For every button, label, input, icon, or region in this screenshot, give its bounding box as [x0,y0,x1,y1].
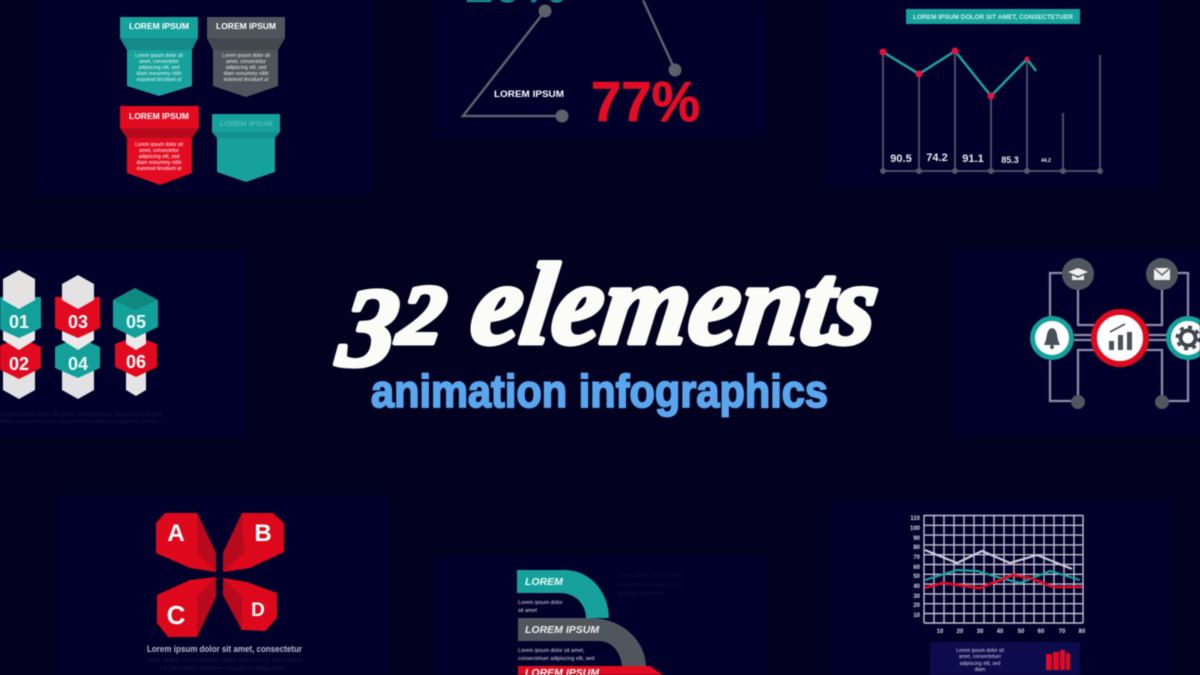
value labels: 44.2 [1041,158,1051,164]
y axis labels: 80 [913,545,921,551]
column 05 06: 05 [126,312,146,332]
legend box: diam [975,667,985,673]
shield: red: diam nonummy nibh [136,160,182,166]
y axis labels: 20 [913,603,921,609]
faint caption: Lorem ipsum dolor sit amet, consectetuer adipiscing elit sed [0,412,162,418]
text block: Lorem ipsum dolor [518,600,563,606]
title: 3 [332,266,406,390]
ribbon: gray [518,618,646,666]
shield: gray: LOREM IPSUM [216,21,276,31]
node dots [1071,395,1169,409]
connector dots [538,4,682,122]
faint text block: consectetuer adipiscing elit [617,582,682,588]
icon: gear [1168,318,1200,358]
text block: Lorem ipsum dolor sit amet, [518,648,585,654]
y axis labels: 70 [913,555,921,561]
panel: curved ribbons [432,555,768,675]
caption: Lorem ipsum dolor sit amet, consectetur [147,644,302,654]
y axis labels: 10 [913,613,921,619]
shield: red [120,106,199,185]
shield: gray: diam nonummy nibh [223,71,269,77]
title: 2 [391,269,451,362]
data line [883,51,1036,96]
petal B: B [254,520,272,547]
panel: line chart [826,0,1160,187]
faint caption [0,412,162,425]
title: elements [464,241,886,369]
series: red [925,575,1082,588]
axis dots [880,168,1103,174]
value labels [890,152,1051,165]
column 01 02 [0,270,41,399]
text block [518,648,594,662]
chart title bar [906,9,1080,24]
y axis labels: 110 [910,516,921,522]
connector lines [1050,273,1188,401]
shield: red: euismod tincidunt ut [137,166,182,172]
legend box: amet, consectetuer [959,654,1002,660]
faint caption: diam nonummy nibh euismod tincidunt ut laoreet dolore [0,419,158,425]
shield: teal: Lorem ipsum dolor sit [135,53,184,59]
panel: ABCD petals [55,495,390,675]
shield: teal: amet, consectetur [139,59,179,65]
shield: red: Lorem ipsum dolor sit [135,142,184,148]
petal C: C [167,600,186,630]
column 03 04: 03 [68,312,88,332]
panel: triangle percent [432,0,765,138]
ribbon: teal [517,570,609,618]
x axis labels: 40 [997,629,1004,635]
ribbon: red [518,666,663,675]
column 01 02: 01 [9,312,29,332]
series: teal [925,570,1080,583]
icon: graduation cap [1062,258,1094,290]
ribbon: teal: LOREM [525,576,563,588]
shield: teal [120,17,198,96]
y axis labels [910,516,921,619]
petal D [223,578,277,631]
petal A: A [167,520,185,547]
text block: sit amet [518,608,537,614]
shield: gray: euismod tincidunt ut [224,77,269,83]
petal D: D [251,600,265,621]
shield: teal, fading in: LOREM IPSUM [220,119,272,128]
faint text block: sed diam nonummy [617,591,664,597]
y axis labels: 30 [913,594,921,600]
shield: red: LOREM IPSUM [129,111,189,121]
column 05 06 [113,288,158,396]
icon: chart [1094,312,1146,364]
faint caption: ut laoreet dolore magna aliquam [160,666,285,672]
title [332,241,886,390]
shield: red: amet, consectetur [139,148,179,154]
petal B [223,513,284,572]
icon: envelope [1146,258,1178,290]
petal A [156,513,216,572]
shield: teal: adipiscing elit, sed [139,65,180,71]
column 03 04: 04 [68,354,88,374]
x axis labels [937,629,1086,635]
icon: bell [1032,318,1072,358]
y axis labels: 40 [913,584,921,590]
x axis labels: 60 [1038,629,1045,635]
legend box [930,642,1080,675]
panel: grid line chart [830,500,1170,675]
value labels: 74.2 [926,152,948,164]
value labels: 85.3 [1001,155,1019,165]
chart title bar: LOREM IPSUM DOLOR SIT AMET, CONSECTETUER [913,15,1074,21]
panel: network icons [952,248,1200,435]
legend box: Lorem ipsum dolor sit [956,648,1005,654]
shield: gray: amet, consectetur [226,59,266,65]
shield: gray: Lorem ipsum dolor sit [222,53,271,59]
shield: red: adipiscing elit, sed [139,154,180,160]
column 03 04 [55,275,100,399]
legend box: adipiscing elit, sed [960,661,1001,667]
x axis labels: 70 [1059,629,1066,635]
faint caption [147,658,302,672]
y axis labels: 50 [913,574,921,580]
x axis labels: 20 [957,629,964,635]
shield: teal, fading in [212,114,280,182]
connector lines [463,0,675,116]
panel: ribbon shields [35,0,372,195]
text block [518,600,563,614]
shield: teal: diam nonummy nibh [136,71,182,77]
ribbon: gray: LOREM IPSUM [525,624,599,636]
x axis labels: 10 [937,629,944,635]
x axis labels: 30 [977,629,984,635]
data points [880,48,1030,100]
y axis labels: 60 [913,565,921,571]
shield: gray [207,17,285,97]
axis lines [883,51,1100,171]
value labels: 90.5 [890,153,912,165]
label: LOREM IPSUM [494,89,564,100]
value labels: 91.1 [962,153,984,165]
percent value: 77% [591,70,700,134]
subtitle: animation infographics [371,365,828,417]
column 01 02: 02 [9,354,29,374]
grid [924,515,1083,623]
faint text block [617,573,684,597]
x axis labels: 50 [1018,629,1025,635]
petal C [157,577,216,637]
icon: red bars [1046,650,1070,670]
y axis labels: 90 [913,536,921,542]
y axis labels: 100 [910,526,921,532]
panel: hexagon columns [0,250,245,438]
column 05 06: 06 [126,352,146,372]
shield: teal: LOREM IPSUM [129,21,189,31]
faint text block: Lorem ipsum dolor sit amet, [617,573,684,579]
x axis labels: 80 [1079,629,1086,635]
shield: gray: adipiscing elit, sed [226,65,267,71]
series: gray [925,550,1072,569]
shield: teal: euismod tincidunt ut [137,77,182,83]
text block: consectetuer adipiscing elit, sed [518,656,594,662]
faint caption: sed diam nonummy nibh euismod tincidunt [147,658,302,664]
